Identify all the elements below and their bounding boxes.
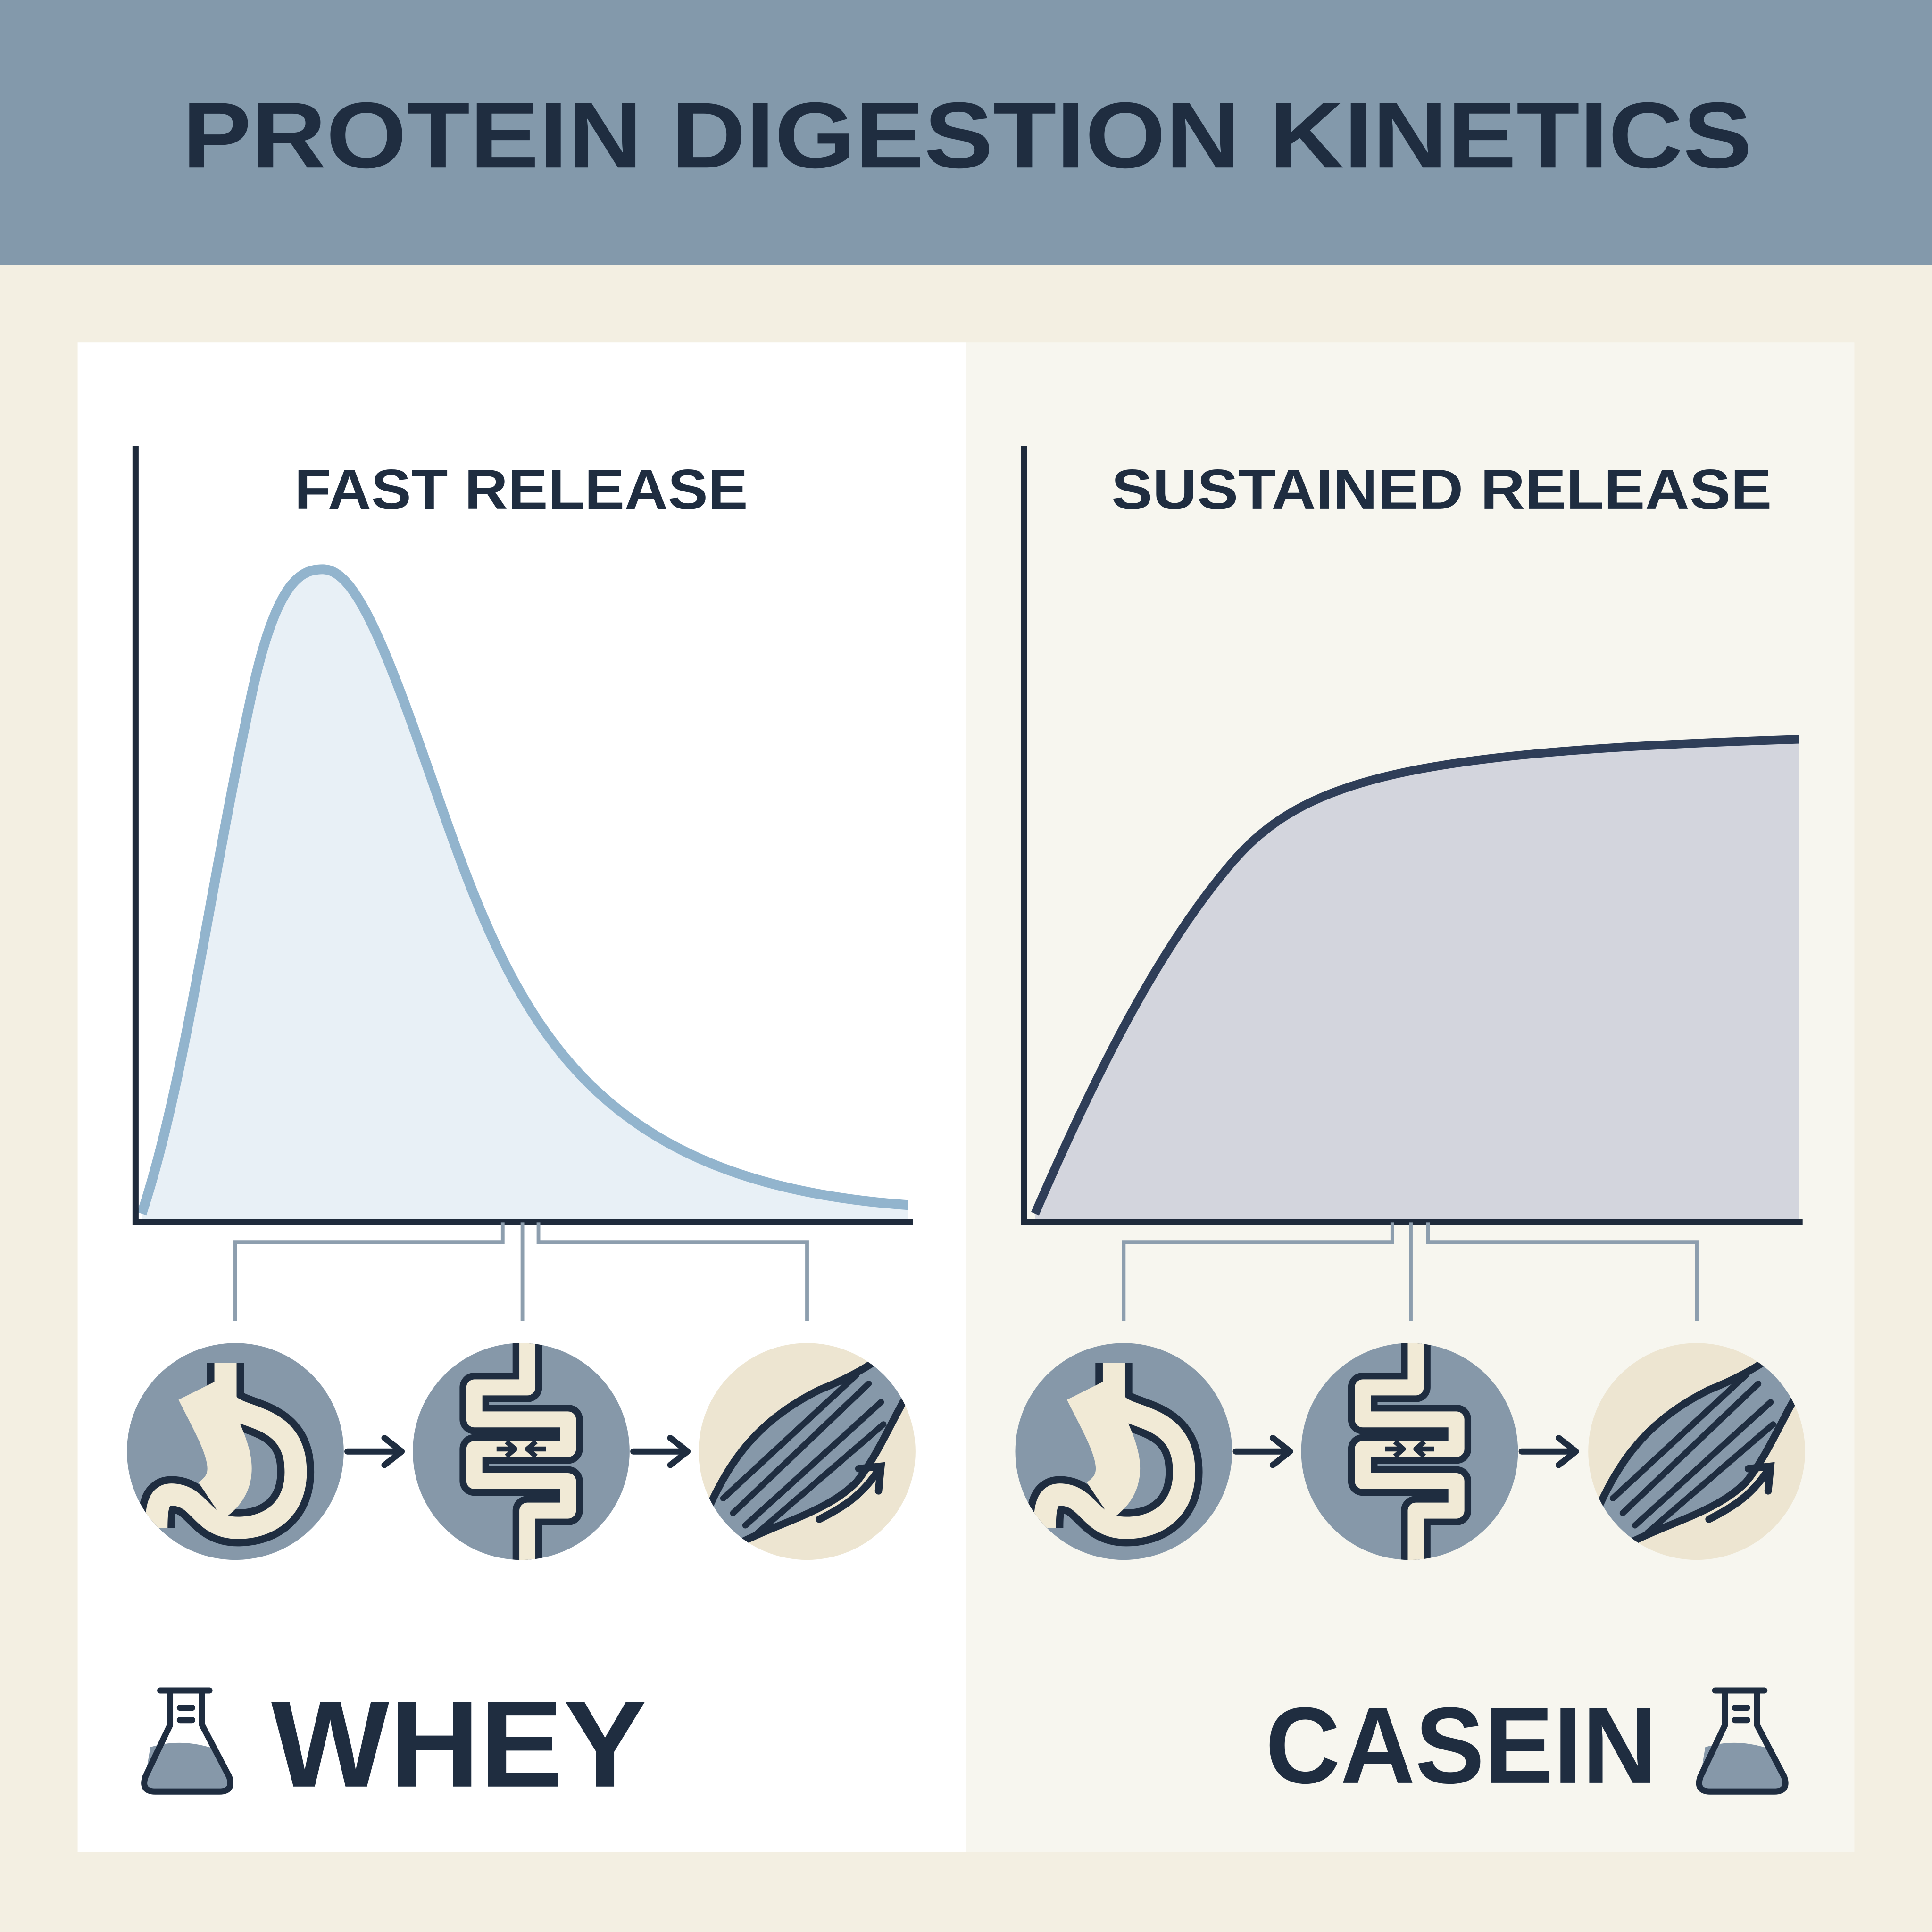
title: PROTEIN DIGESTION KINETICS xyxy=(183,83,1752,188)
panel: whey xyxy=(78,342,966,1852)
arrow xyxy=(1236,1438,1290,1465)
label: whey: WHEY xyxy=(271,1676,647,1813)
connector brackets xyxy=(1124,1222,1697,1321)
icon: flask xyxy=(144,1690,230,1791)
connector brackets xyxy=(235,1222,807,1321)
icon: flask xyxy=(1699,1690,1785,1791)
icon: stomach xyxy=(127,1343,344,1560)
panel: casein xyxy=(966,342,1854,1852)
header band xyxy=(0,0,1932,265)
arrow xyxy=(1522,1438,1576,1465)
icon: muscle xyxy=(696,1343,918,1562)
arrow xyxy=(348,1438,402,1465)
chart: whey fast release curve xyxy=(135,446,913,1222)
icon: muscle xyxy=(1586,1343,1807,1562)
icon: intestine xyxy=(1301,1338,1518,1565)
icon: intestine xyxy=(413,1338,630,1565)
heading: sustained release: SUSTAINED RELEASE xyxy=(1111,458,1772,521)
icon: stomach xyxy=(1015,1343,1232,1560)
heading: fast release: FAST RELEASE xyxy=(294,458,748,521)
chart: casein sustained release curve xyxy=(1024,446,1803,1222)
label: casein: CASEIN xyxy=(1266,1685,1657,1806)
arrow xyxy=(633,1438,688,1465)
